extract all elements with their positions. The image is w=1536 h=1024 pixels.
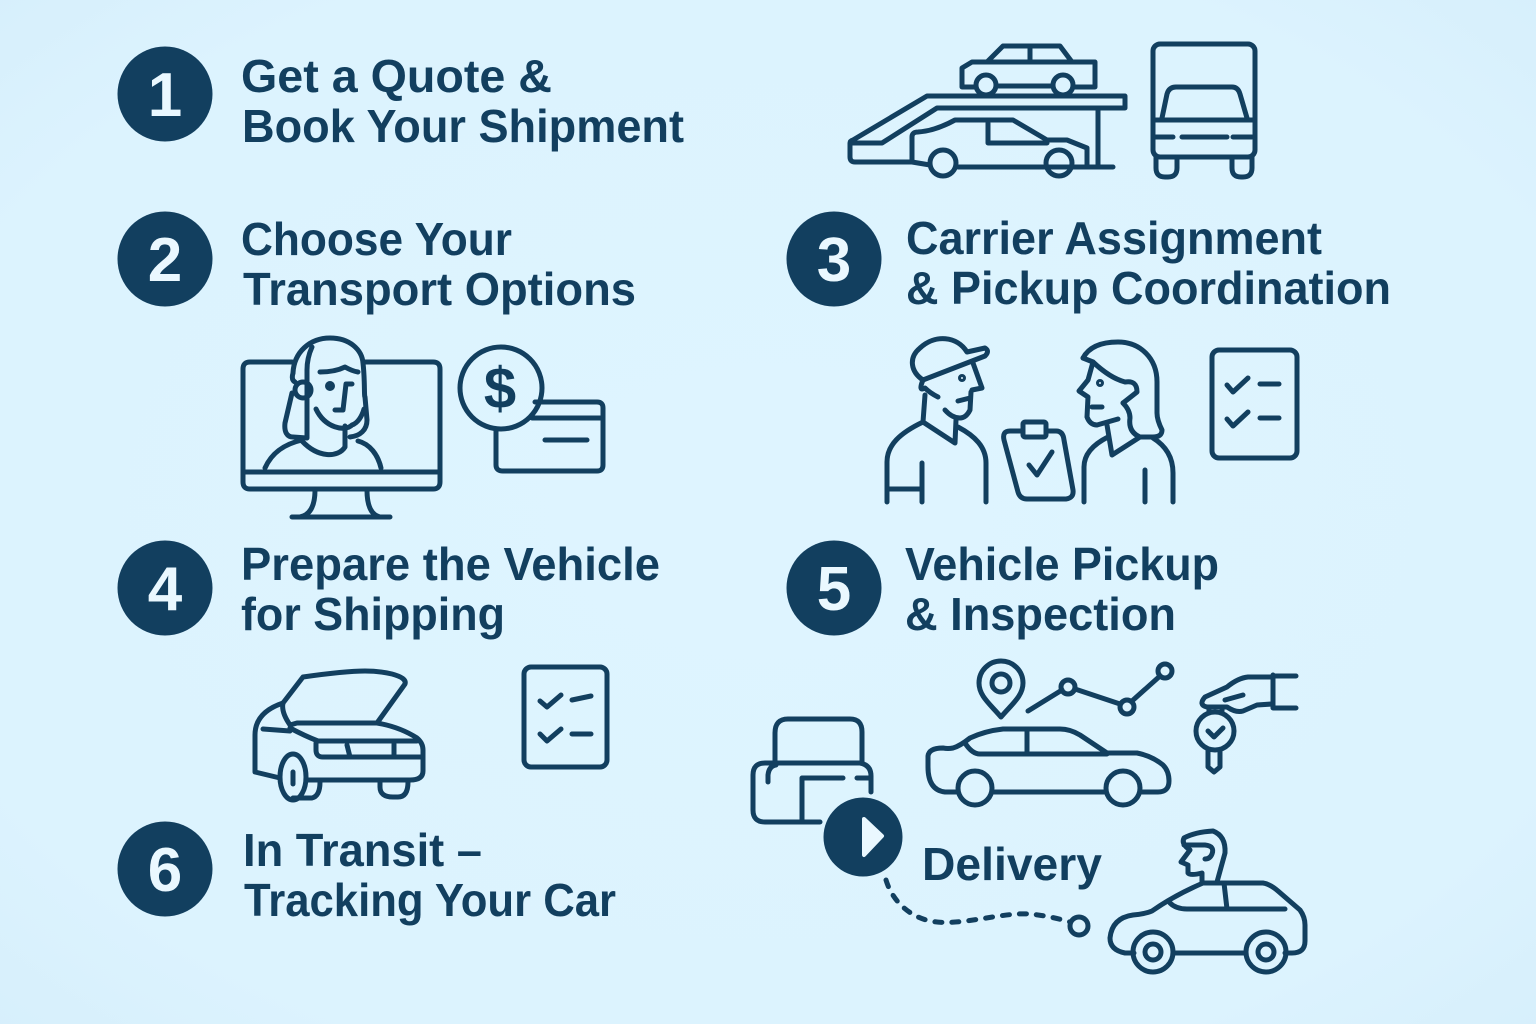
- heading: step 2: [241, 213, 636, 315]
- icon: sedan side view: [928, 729, 1169, 805]
- panel: step 2 transport options: [118, 212, 636, 517]
- icon: truck front view: [1153, 44, 1255, 177]
- number badge 5: 5: [817, 555, 851, 624]
- heading: step 4: [241, 538, 660, 640]
- heading: step 6: Tracking Your Car: [244, 874, 616, 926]
- icon: checklist: [524, 667, 607, 767]
- icon: woman customer: [1079, 342, 1173, 502]
- number badge 2: [118, 212, 212, 306]
- heading: step 1: [241, 50, 684, 152]
- heading: step 3: & Pickup Coordination: [906, 262, 1391, 314]
- icon: dollar coin and credit card: [460, 347, 603, 471]
- number badge 4: [118, 540, 212, 636]
- icon: checklist card: [1212, 350, 1297, 458]
- panel: step 5 vehicle pickup: [786, 538, 1296, 805]
- heading: step 3: [906, 212, 1391, 314]
- icon: car with open hood: [255, 671, 423, 800]
- panel: step 6 in transit: [118, 822, 616, 926]
- icon: clipboard with check: [1004, 422, 1073, 499]
- heading: step 6: [243, 824, 616, 926]
- number badge 6: 6: [148, 836, 182, 905]
- number badge 4: 4: [148, 555, 183, 624]
- heading: step 5: & Inspection: [905, 588, 1176, 640]
- number badge 3: 3: [817, 226, 851, 295]
- icon: dollar coin and credit card: $: [484, 356, 516, 421]
- number badge 6: [118, 822, 212, 916]
- panel: step 1 get a quote: [118, 44, 1255, 177]
- heading: step 4: for Shipping: [241, 588, 505, 640]
- heading: step 5: [905, 538, 1219, 640]
- heading: step 1: Get a Quote &: [241, 50, 552, 102]
- icon: printer shaped box: [753, 719, 871, 822]
- panel: delivery: [753, 719, 1305, 972]
- icon: car carrier ramp with two cars: [850, 46, 1125, 176]
- heading: step 5: Vehicle Pickup: [905, 538, 1219, 590]
- number badge 5: [786, 540, 882, 636]
- icon: route line with nodes: [1028, 664, 1172, 714]
- panel: step 4 prepare the vehicle: [118, 538, 660, 800]
- icon: play button circle: [824, 798, 902, 876]
- heading: step 1: Book Your Shipment: [242, 100, 684, 152]
- icon: agent on monitor: [243, 338, 440, 517]
- heading: delivery: Delivery: [922, 838, 1102, 890]
- heading: step 3: Carrier Assignment: [906, 212, 1322, 264]
- number badge 1: [118, 46, 212, 142]
- number badge 2: 2: [148, 226, 182, 295]
- heading: step 6: In Transit –: [243, 824, 482, 876]
- panel: step 3 carrier assignment: [786, 212, 1391, 502]
- icon: person in car: [1110, 831, 1305, 972]
- number badge 3: [786, 212, 882, 306]
- icon: hand holding key: [1196, 675, 1296, 772]
- heading: step 2: Choose Your: [241, 213, 512, 265]
- icon: location pin: [979, 661, 1023, 717]
- number badge 1: 1: [148, 61, 182, 130]
- heading: step 2: Transport Options: [243, 263, 636, 315]
- dashed route to destination: [886, 880, 1088, 935]
- icon: driver with cap: [887, 339, 988, 502]
- heading: step 4: Prepare the Vehicle: [241, 538, 660, 590]
